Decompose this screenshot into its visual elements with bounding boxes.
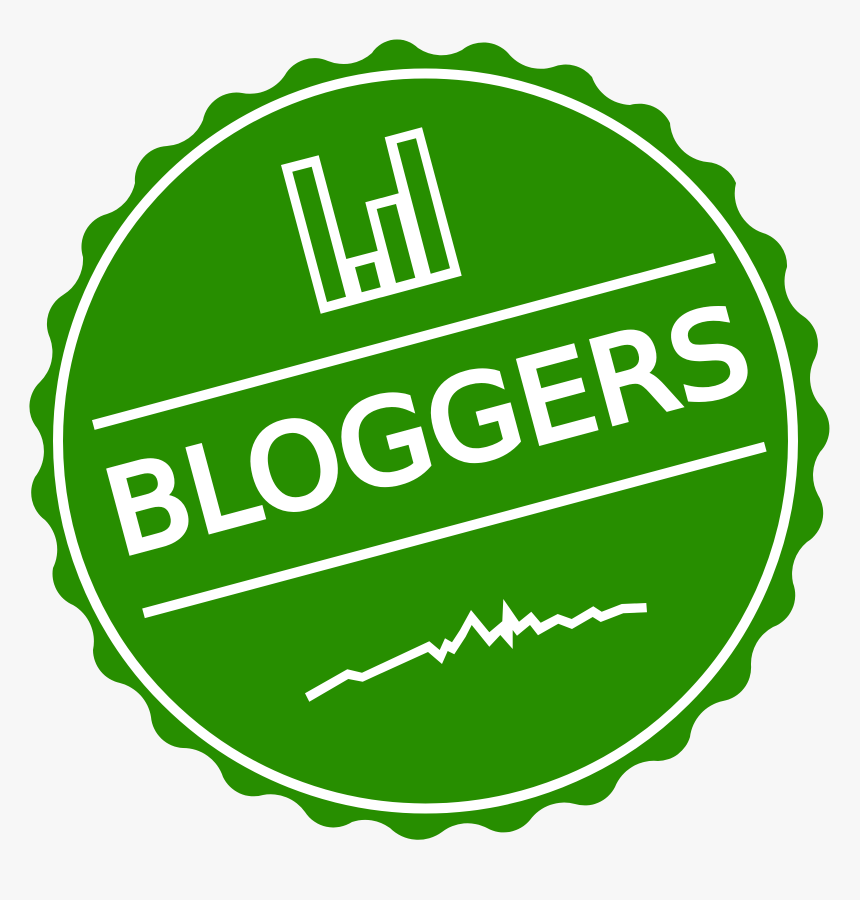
white ring bbox=[58, 74, 793, 808]
lower divider line bbox=[144, 447, 765, 613]
icon: bar chart bbox=[281, 127, 462, 314]
icon: line chart bbox=[305, 599, 647, 702]
title: BLOGGERS: BLOGGERS bbox=[92, 280, 764, 583]
upper divider line bbox=[93, 258, 715, 425]
